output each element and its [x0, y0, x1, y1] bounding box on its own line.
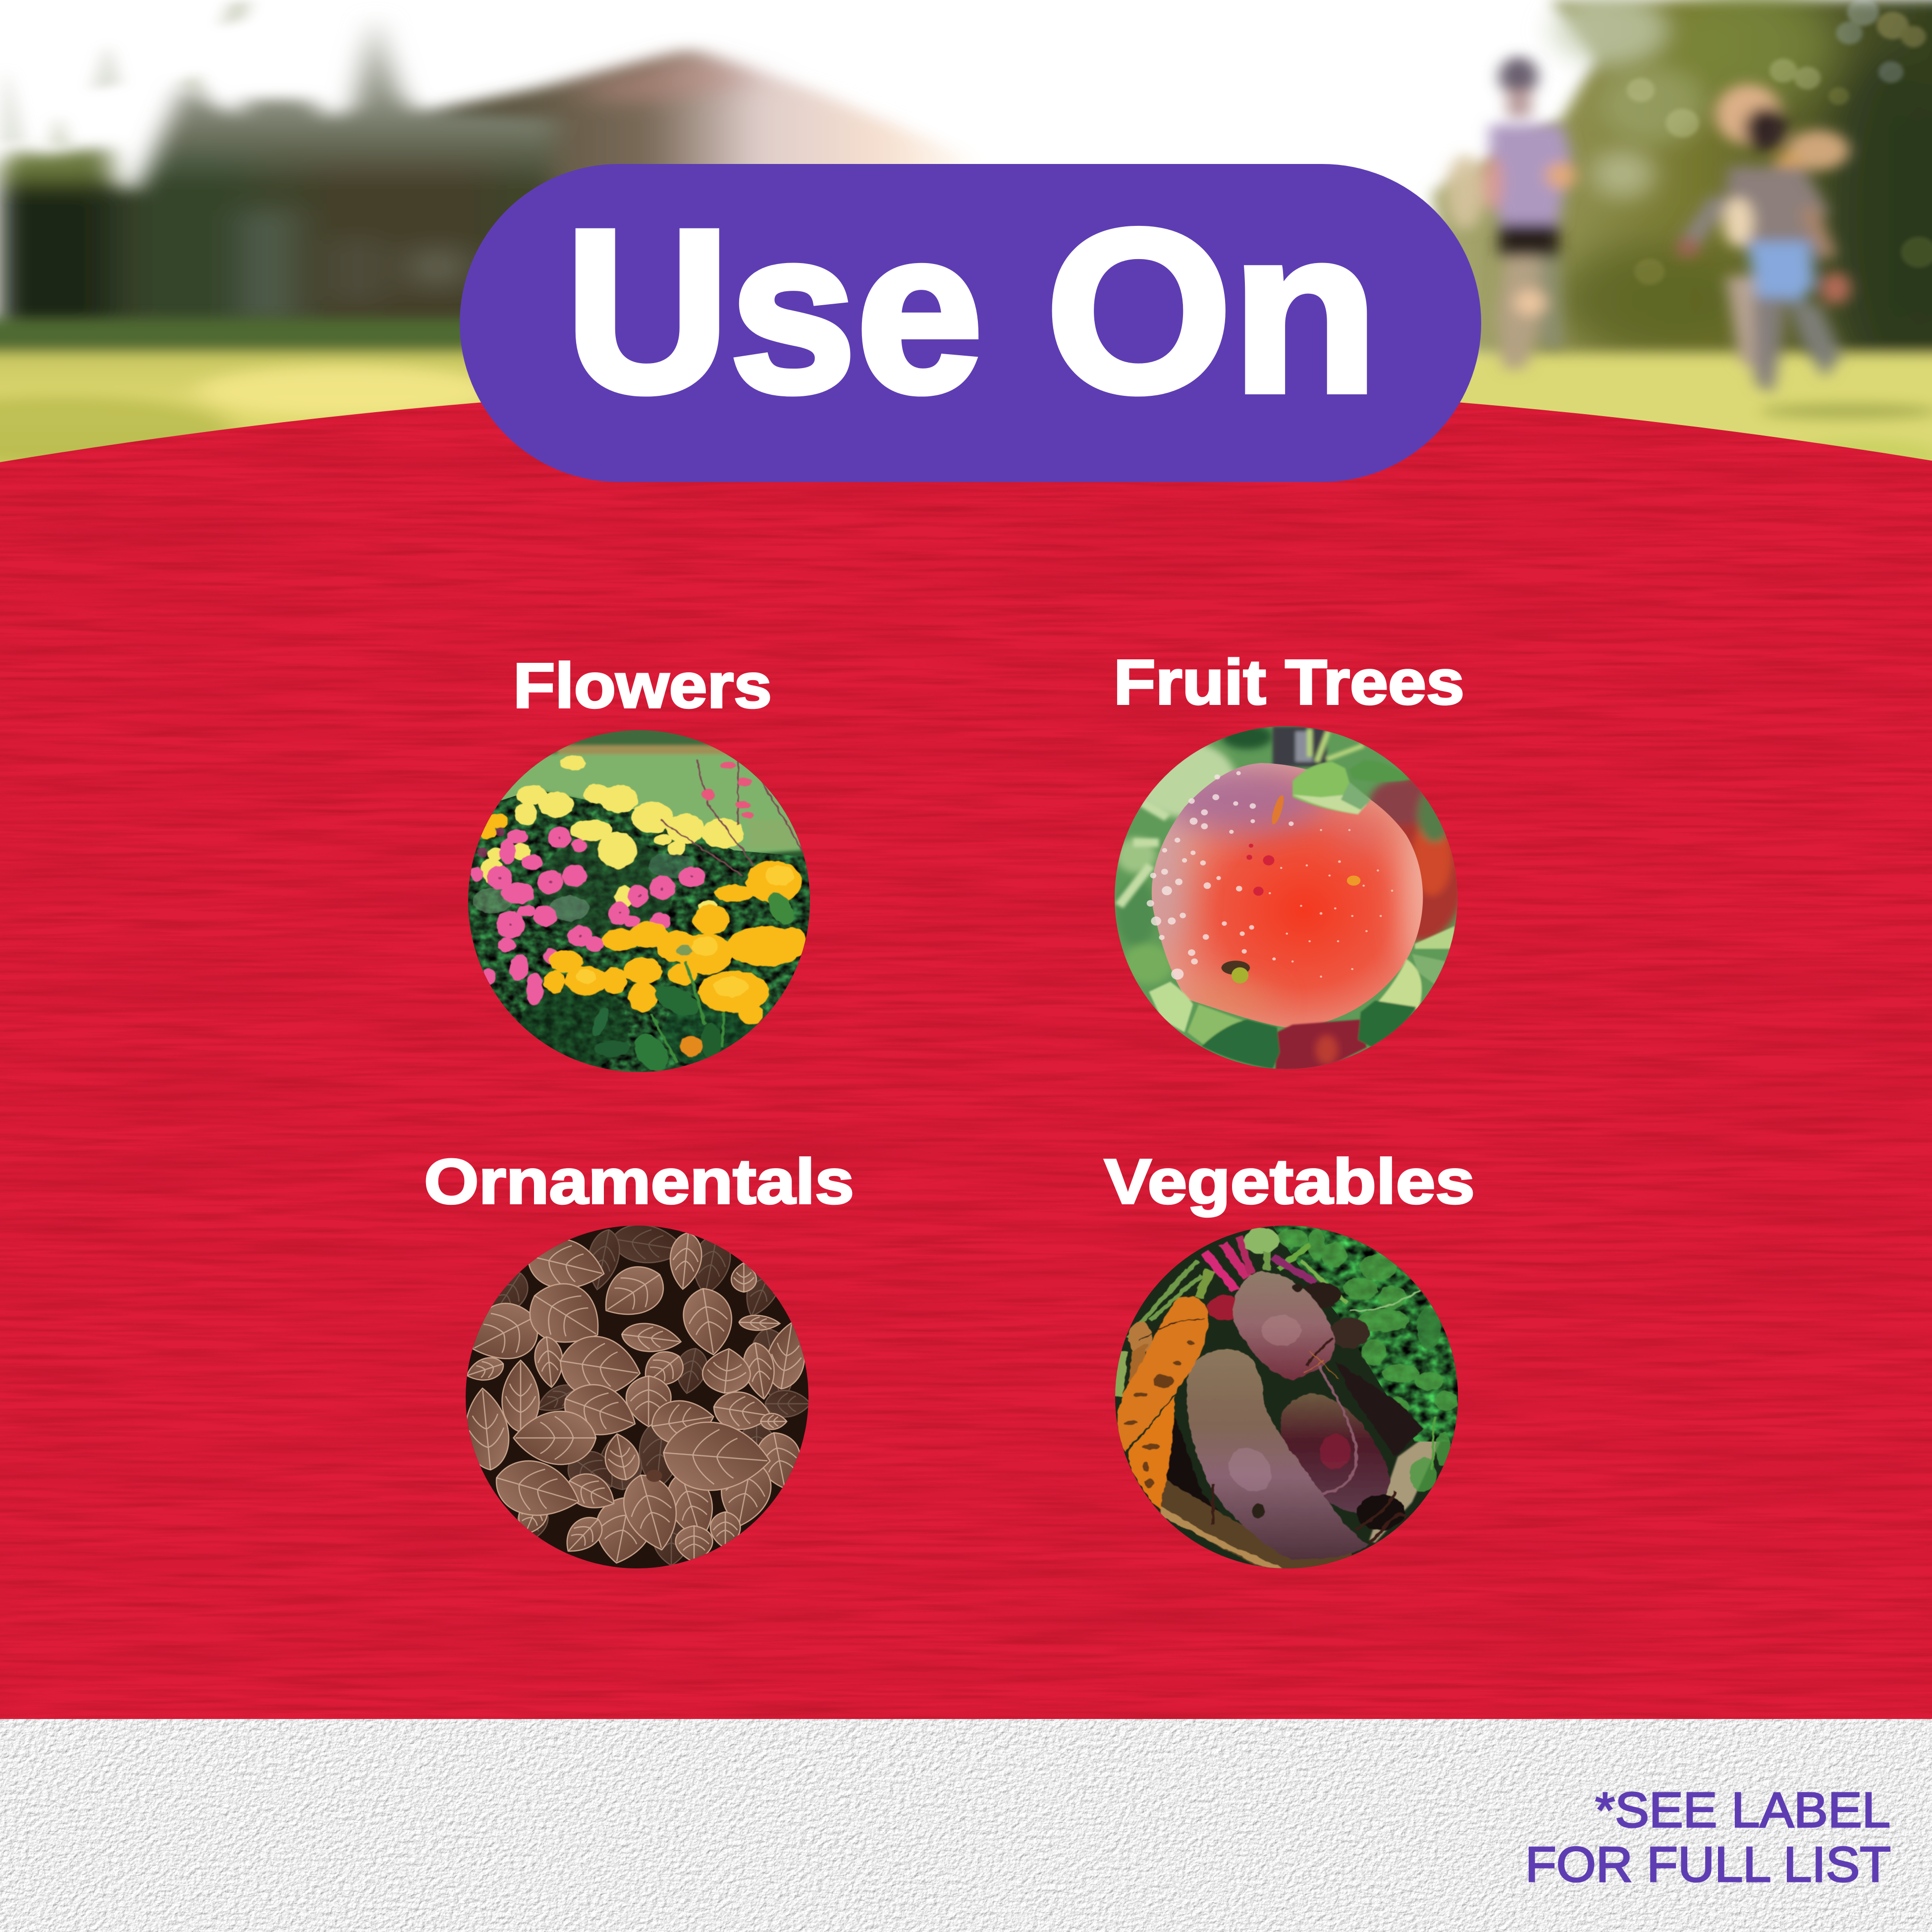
item: Flowers [464, 650, 816, 1076]
soil [1162, 1391, 1224, 1517]
photo: beets and carrots in a crate [1108, 1222, 1466, 1573]
background photo: blurred yard with house and children [0, 0, 1932, 495]
carrots [1128, 1322, 1152, 1354]
heading: Use On: On [1046, 181, 1378, 440]
stalks [1204, 1252, 1235, 1290]
title pill: Use On [460, 164, 1481, 482]
white plaster footer band [0, 1719, 1932, 1932]
footnote: see label for full list: *SEE LABEL [1595, 1782, 1890, 1838]
label: Flowers: Flowers [513, 650, 772, 721]
label: Ornamentals: Ornamentals [424, 1146, 854, 1217]
orange-yellow daisies [480, 813, 807, 1023]
photo: flower bed [464, 726, 816, 1076]
child in blue diaper [1676, 84, 1851, 393]
leaves around apple [1149, 760, 1454, 1070]
footnote: see label for full list [1525, 1782, 1891, 1892]
apple body [1145, 763, 1441, 1027]
leaves [763, 889, 799, 928]
crate side and greens [1369, 1432, 1443, 1543]
marigolds [482, 755, 744, 912]
footnote: see label for full list: FOR FULL LIST [1525, 1837, 1891, 1892]
child in lavender shirt [1446, 57, 1576, 369]
label: Vegetables: Vegetables [1104, 1146, 1475, 1217]
item: Vegetables [1104, 1146, 1475, 1573]
item: Fruit Trees [1108, 647, 1469, 1073]
crate wood [1159, 1478, 1352, 1573]
house, trees and lawn on the left [0, 0, 966, 479]
beets [1233, 1271, 1335, 1380]
label: Fruit Trees: Fruit Trees [1114, 647, 1464, 718]
photo: copper-brown foliage [457, 1221, 813, 1573]
petunias [470, 827, 705, 1006]
heading: Use On [565, 181, 1378, 440]
trees, lawn and two running children on the right [1366, 0, 1932, 481]
stems [660, 759, 802, 875]
photo: wet apple on branch [1108, 724, 1469, 1073]
red wood-grain panel with curved top [0, 382, 1932, 1719]
heading: Use On: Use [565, 181, 983, 440]
item: Ornamentals [424, 1146, 854, 1573]
